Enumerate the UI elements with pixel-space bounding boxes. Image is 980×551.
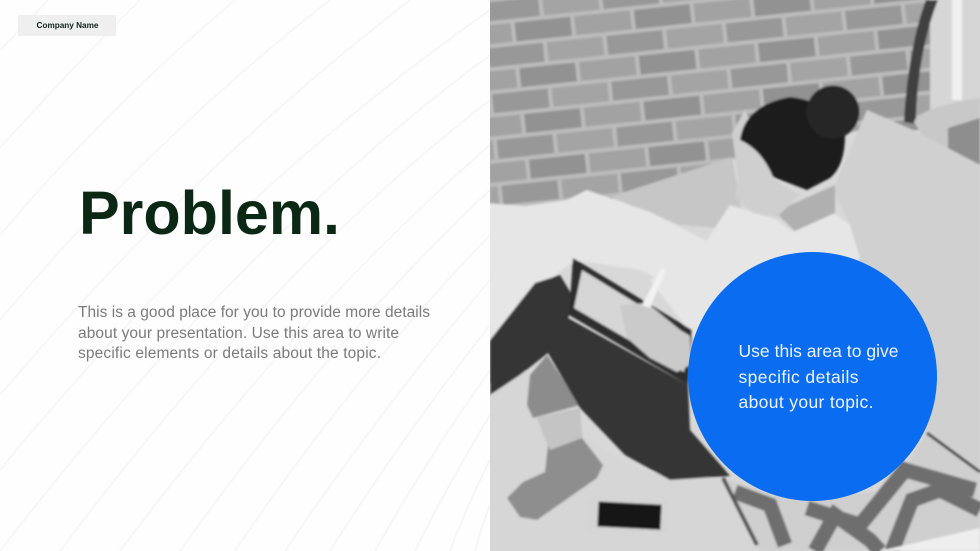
plant stem xyxy=(904,0,938,124)
text block: description xyxy=(78,304,430,362)
callout: blue circle with text: about your topic. xyxy=(738,392,874,412)
bedspread bottom xyxy=(485,370,765,551)
lower leg and foot xyxy=(507,408,603,520)
jeans xyxy=(490,275,730,480)
tablet xyxy=(569,258,692,385)
right cushion xyxy=(833,110,980,470)
tag: company name: Company Name xyxy=(37,21,98,30)
hair xyxy=(740,97,845,190)
blanket xyxy=(485,190,705,340)
sweater xyxy=(650,205,860,345)
brick wall xyxy=(485,0,935,215)
neck xyxy=(775,185,835,231)
callout: blue circle with text: specific details xyxy=(738,367,859,387)
curtain xyxy=(930,0,980,110)
panel: left text area with faint line background xyxy=(0,0,490,551)
callout: blue circle with text: Use this area to give xyxy=(738,341,898,361)
callout: blue circle with text xyxy=(688,252,937,501)
patterned pillow xyxy=(723,432,980,551)
sofa back xyxy=(610,157,745,230)
text block: description: This is a good place for you to provide more details xyxy=(78,304,430,321)
text block: description: about your presentation. Use this area to write xyxy=(78,325,399,342)
hair bun xyxy=(806,86,860,138)
face xyxy=(732,110,800,217)
tag: company name xyxy=(18,15,116,36)
rolled back leg xyxy=(527,355,580,418)
text block: description: specific elements or details about the topic. xyxy=(78,345,381,362)
panel: black and white photo of woman with tablet on a sofa xyxy=(490,0,980,551)
hand xyxy=(620,303,690,372)
phone xyxy=(586,497,669,534)
books on shelf xyxy=(914,98,980,165)
title: Problem. xyxy=(79,179,340,247)
stylus xyxy=(642,268,666,308)
